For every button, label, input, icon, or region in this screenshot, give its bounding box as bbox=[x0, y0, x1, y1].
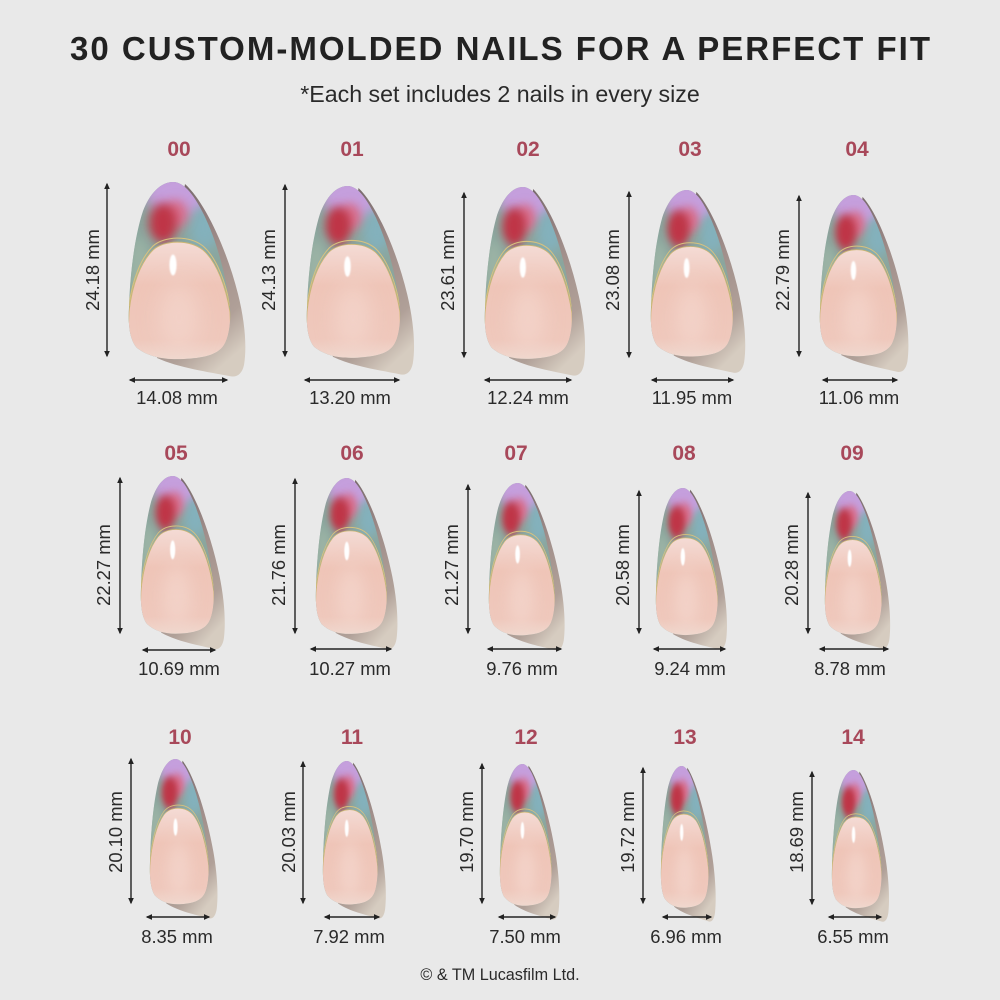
title: 30 CUSTOM-MOLDED NAILS FOR A PERFECT FIT bbox=[70, 30, 930, 67]
size 04: 22.79 mm bbox=[772, 229, 793, 311]
size 14: 14 bbox=[841, 726, 865, 749]
size 08 bbox=[612, 442, 727, 679]
size 14: 6.55 mm bbox=[817, 926, 889, 947]
size 09: 20.28 mm bbox=[781, 524, 802, 606]
size 12: 12 bbox=[514, 726, 538, 749]
size 10: 10 bbox=[168, 726, 192, 749]
subtitle: *Each set includes 2 nails in every size bbox=[300, 81, 700, 107]
size 00 bbox=[82, 138, 245, 408]
size 08: 9.24 mm bbox=[654, 658, 726, 679]
size 04 bbox=[772, 138, 908, 408]
size 03: 23.08 mm bbox=[602, 229, 623, 311]
size 13: 13 bbox=[673, 726, 697, 749]
size 05: 22.27 mm bbox=[93, 524, 114, 606]
size 11: 11 bbox=[341, 726, 363, 749]
size 04: 04 bbox=[845, 138, 869, 161]
size 12: 19.70 mm bbox=[456, 791, 477, 873]
size 09 bbox=[781, 442, 890, 679]
size 06: 10.27 mm bbox=[309, 658, 391, 679]
size 07: 21.27 mm bbox=[441, 524, 462, 606]
size 01: 24.13 mm bbox=[258, 229, 279, 311]
size 07: 07 bbox=[504, 442, 528, 465]
size 06 bbox=[268, 442, 397, 679]
size 11: 20.03 mm bbox=[278, 791, 299, 873]
size 00: 14.08 mm bbox=[136, 387, 218, 408]
size 11: 7.92 mm bbox=[313, 926, 385, 947]
size 08: 08 bbox=[672, 442, 696, 465]
size 12: 7.50 mm bbox=[489, 926, 561, 947]
size 10: 8.35 mm bbox=[141, 926, 213, 947]
size 05: 05 bbox=[164, 442, 188, 465]
size 02 bbox=[437, 138, 585, 408]
size 01 bbox=[258, 138, 414, 408]
size 03: 11.95 mm bbox=[652, 387, 732, 408]
size 13: 19.72 mm bbox=[617, 791, 638, 873]
size 06: 06 bbox=[340, 442, 364, 465]
size 05 bbox=[93, 442, 225, 679]
size 14: 18.69 mm bbox=[786, 791, 807, 873]
size 10 bbox=[105, 726, 217, 947]
size 06: 21.76 mm bbox=[268, 524, 289, 606]
size 10: 20.10 mm bbox=[105, 791, 126, 873]
size 01: 13.20 mm bbox=[309, 387, 391, 408]
size 02: 23.61 mm bbox=[437, 229, 458, 311]
size 08: 20.58 mm bbox=[612, 524, 633, 606]
size 01: 01 bbox=[340, 138, 364, 161]
size 11 bbox=[278, 726, 386, 947]
size 03 bbox=[602, 138, 745, 408]
size 09: 8.78 mm bbox=[814, 658, 886, 679]
size 13 bbox=[617, 726, 722, 947]
footer copyright: © & TM Lucasfilm Ltd. bbox=[420, 966, 580, 984]
size 14 bbox=[786, 726, 889, 947]
size 03: 03 bbox=[678, 138, 702, 161]
size 00: 00 bbox=[167, 138, 191, 161]
size 07 bbox=[441, 442, 565, 679]
size 00: 24.18 mm bbox=[82, 229, 103, 311]
size 02: 02 bbox=[516, 138, 540, 161]
size 07: 9.76 mm bbox=[486, 658, 558, 679]
size 04: 11.06 mm bbox=[819, 387, 899, 408]
size 12 bbox=[456, 726, 561, 947]
size 13: 6.96 mm bbox=[650, 926, 722, 947]
size 05: 10.69 mm bbox=[138, 658, 220, 679]
size 09: 09 bbox=[840, 442, 864, 465]
size 02: 12.24 mm bbox=[487, 387, 569, 408]
